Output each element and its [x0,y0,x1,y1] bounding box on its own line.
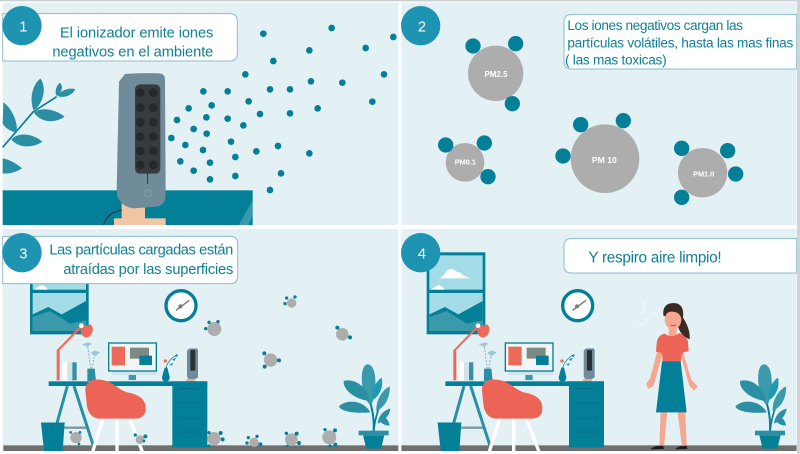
office scene [400,252,798,452]
particle PM 10: PM 10 [592,155,617,165]
callout 1: El ionizador emite iones [60,25,213,41]
step badge 4 [401,233,440,272]
callout 2: Los iones negativos cargan las [567,18,743,33]
callout 3: atraídas por las superficies [63,262,233,278]
panel 3: charged particles attracted to surfaces [2,229,402,452]
step badge 3: 3 [19,247,27,263]
woman breathing [638,300,698,449]
step badge 4: 4 [418,247,426,263]
office scene [3,252,402,452]
callout 2 [564,15,797,69]
potted plant [735,364,787,449]
callout 1 [3,14,237,61]
particle PM0.1 [438,135,496,184]
particle PM1.0 [674,141,743,205]
particle PM0.1: PM0.1 [455,157,476,166]
step badge 1 [2,6,42,45]
callout 1: negativos en el ambiente [52,45,213,61]
negative ions [168,25,397,193]
callout 4 [564,239,797,273]
callout 2: partículas volátiles, hasta las mas finas [567,35,794,50]
callout 3: Las partículas cargadas están [49,242,233,258]
panel 4: clean air [400,229,798,452]
particle PM 10 [555,113,639,193]
step badge 3 [2,233,42,272]
callout 2: ( las mas toxicas) [565,53,667,68]
floating and settled particles [69,295,352,448]
table [3,190,253,225]
callout 4: Y respiro aire limpio! [588,249,722,266]
potted plant [339,364,390,449]
particle PM2.5: PM2.5 [484,70,508,79]
panel 1: ionizer emits ions [0,0,800,225]
step badge 2: 2 [418,20,426,36]
ionizer device [103,73,166,225]
branch with leaves [3,79,75,173]
panel 2: ions charge particles [400,0,800,225]
callout 3 [3,236,238,284]
step badge 1: 1 [19,20,27,36]
step badge 2 [401,6,440,45]
particle PM2.5 [465,36,523,111]
right edge line [797,0,800,454]
particle PM1.0: PM1.0 [693,170,714,179]
